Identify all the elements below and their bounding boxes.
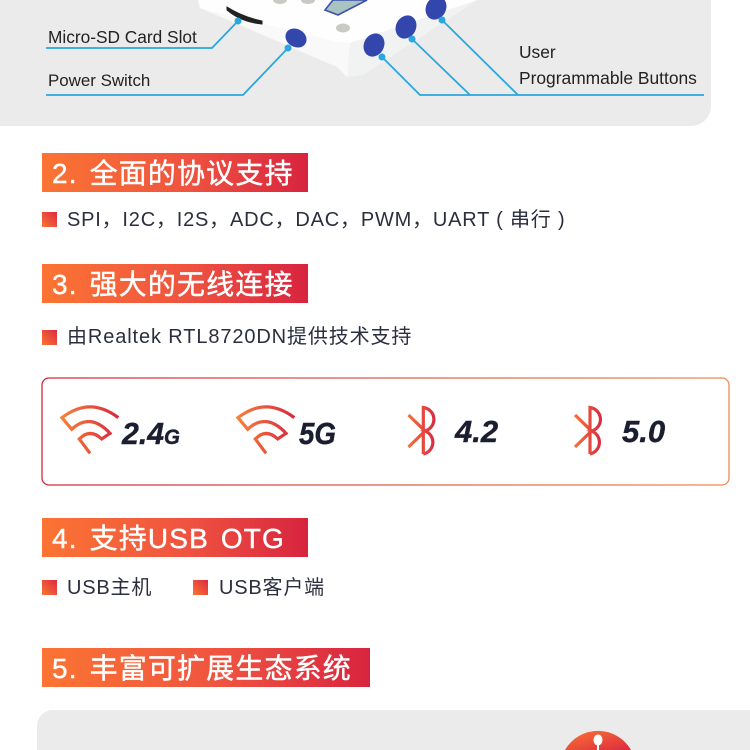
label: 5G: 5G: [299, 416, 336, 451]
text: protocol list: SPI，I2C，I2S，ADC，DAC，PWM，UART ( 串行 ): [67, 209, 565, 231]
icon: bluetooth 4.2: [408, 408, 434, 454]
label: 4.2: 4.2: [454, 414, 498, 449]
bullet icon: wireless: [42, 330, 57, 345]
heading: section 4: 4. 支持USB OTG: [52, 523, 285, 554]
bullet icon: USB client: [193, 580, 208, 595]
heading: section 3: 3. 强大的无线连接: [52, 269, 294, 300]
callout lines: [46, 16, 704, 96]
heading: section 4: [42, 518, 308, 557]
icon: orange ecosystem node: [565, 730, 631, 750]
label: user programmable buttons: [519, 42, 697, 88]
panel: ecosystem: [37, 710, 750, 750]
label: user programmable buttons: Programmable Buttons: [519, 68, 697, 88]
bullet icon: USB host: [42, 580, 57, 595]
heading: section 5: 5. 丰富可扩展生态系统: [52, 653, 352, 684]
text: wireless chip: 由Realtek RTL8720DN提供技术支持: [67, 326, 412, 348]
label: user programmable buttons: User: [519, 42, 556, 62]
panel: wireless standards: [41, 377, 730, 486]
label: power switch: Power Switch: [48, 71, 150, 90]
label: 2.4G: 2.4G: [121, 416, 180, 451]
bullet icon: protocols: [42, 212, 57, 227]
panel border: [42, 378, 729, 485]
text: USB client: USB客户端: [219, 577, 325, 599]
icon: wifi 5G: [238, 407, 294, 453]
icon: bluetooth 5.0: [575, 408, 600, 454]
device illustration: [198, 0, 476, 76]
text: USB host: USB主机: [67, 577, 152, 599]
heading: section 2: 2. 全面的协议支持: [52, 158, 294, 189]
panel: device hardware diagram: [0, 0, 711, 126]
icon: wifi 2.4G: [62, 407, 118, 453]
label: 5.0: 5.0: [622, 414, 665, 449]
label: micro-SD card slot: Micro-SD Card Slot: [48, 27, 197, 47]
